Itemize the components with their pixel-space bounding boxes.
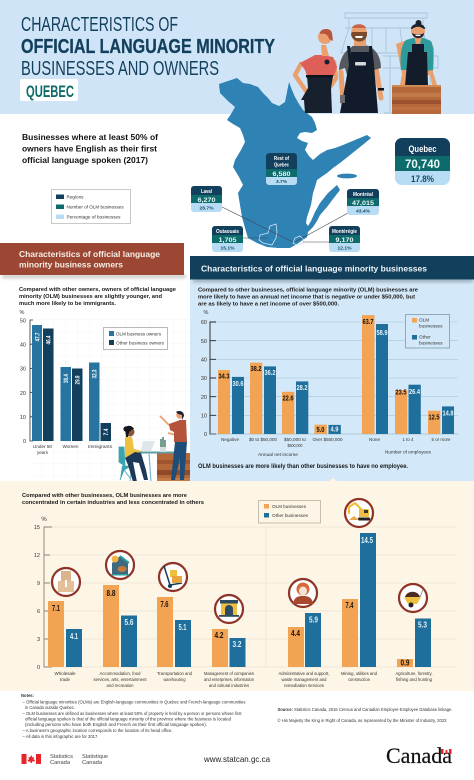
- map: Anticosti island: [337, 174, 357, 178]
- icon: excavator: [345, 499, 373, 527]
- title: [21, 13, 275, 80]
- text block: notes: Notes:: [21, 693, 35, 698]
- icon: accommodation and food: [106, 551, 134, 579]
- bar chart: business owners: Under 50: [33, 444, 52, 449]
- legend: owners: Other business owners: [116, 340, 165, 346]
- callout: Quebec total: 70,740: [405, 157, 440, 171]
- callout: Laval: [191, 186, 222, 212]
- icon: wholesale boxes: [52, 568, 80, 596]
- bar chart: net income and employees: Negative: [221, 437, 239, 442]
- text block: notes: [21, 693, 246, 739]
- bar chart: net income and employees: 30.6: [232, 381, 244, 388]
- panel: businesses header: [190, 256, 474, 282]
- text block: source: © His Majesty the King in Right of Canada, as represented by the Minister of Industry, 2023: [278, 718, 447, 723]
- title: OFFICIAL LANGUAGE MINORITY: [21, 35, 275, 58]
- map: Quebec: [219, 78, 371, 248]
- bar chart: net income and employees: 22.6: [282, 396, 294, 402]
- callout: Outaouais: [212, 226, 243, 252]
- bar chart: industries: 4.1: [70, 632, 78, 641]
- legend: businesses: businesses: [419, 324, 443, 328]
- logo: Statistics Canada flag: Statistics: [50, 754, 73, 760]
- leader lines: [222, 207, 348, 242]
- callout: Rest of Quebec: Quebec: [274, 162, 289, 168]
- callout: Monteregie: Montérégie: [332, 229, 357, 235]
- bar chart: net income and employees: 50: [201, 339, 207, 345]
- callout: Outaouais: Outaouais: [216, 229, 239, 235]
- callout: Montreal: [347, 189, 379, 215]
- bar chart: net income and employees: 28.2: [296, 385, 308, 392]
- legend: map: Percentage of businesses: [66, 214, 121, 220]
- bar chart: business owners: 32.3: [92, 369, 98, 378]
- callout: Rest of Quebec: 6,580: [272, 171, 291, 178]
- panel: businesses header: Characteristics of official language minority businesses: [201, 264, 427, 274]
- text block: intro: official language spoken (2017): [22, 156, 148, 165]
- bar chart: net income and employees: 23.5: [396, 390, 407, 396]
- bar chart: industries: services, arts, entertainment: [94, 677, 147, 682]
- bar chart: net income and employees: 38.2: [250, 366, 262, 373]
- bar chart: industries: waste management and: [282, 677, 327, 682]
- bar chart: net income and employees: 36.2: [264, 370, 276, 377]
- bar chart: industries: Mining, utilities and: [341, 671, 377, 676]
- bar chart: industries: 7.1: [52, 604, 60, 613]
- panel: header banner: [0, 0, 474, 114]
- text block: notes: – Official language minorities (OLMs) are English-language communities in Quebec and French-language communities: [22, 700, 246, 704]
- bar chart: industries: 0.9: [400, 658, 410, 668]
- callout: Monteregie: 12.1%: [338, 246, 352, 252]
- callout: Rest of Quebec: 3.7%: [276, 179, 288, 185]
- badge: Quebec: QUEBEC: [26, 82, 74, 101]
- bar chart: net income and employees: 14.8: [442, 410, 454, 418]
- bar chart: net income and employees: 63.7: [362, 319, 374, 326]
- bar chart: business owners: years: [37, 450, 49, 455]
- callout: Rest of Quebec: [266, 153, 297, 185]
- bar chart: industries: 7.4: [346, 601, 354, 610]
- callout: Outaouais: 1,705: [218, 237, 237, 244]
- bar chart: industries: and cultural industries: [209, 683, 250, 688]
- text block: businesses summary: more likely to have an annual net income that is negative or under $50,000, but: [198, 294, 415, 300]
- legend: map: Regions: [66, 194, 84, 200]
- bar chart: industries: 4.2: [214, 631, 224, 640]
- bar chart: business owners: Women: [62, 444, 79, 449]
- bar chart: net income and employees: [201, 310, 458, 457]
- bar chart: net income and employees: 20: [201, 395, 207, 401]
- bar chart: net income and employees: 26.4: [409, 389, 420, 396]
- bar chart: industries: trade: [60, 677, 70, 682]
- legend: industries: Other businesses: [272, 513, 309, 518]
- legend: businesses: Other: [419, 334, 431, 340]
- illustration: storefront outline: [341, 13, 438, 113]
- bar chart: net income and employees: 10: [201, 414, 207, 420]
- text block: intro: [22, 133, 158, 165]
- bar chart: industries: Accommodation, food: [100, 671, 141, 676]
- bar chart: business owners: 29.8: [74, 375, 82, 384]
- bar chart: industries: Transportation and: [157, 671, 192, 676]
- bar chart: business owners: 0: [23, 439, 26, 445]
- text block: owners summary: much more likely to be immigrants.: [19, 301, 116, 307]
- text block: businesses summary: Compared to other businesses, official language minority (OLM) businesses are: [198, 288, 419, 294]
- title: CHARACTERISTICS OF: [21, 13, 178, 36]
- illustration: woman with red shirt: [295, 29, 337, 113]
- bar chart: net income and employees: $50,000 to: [284, 437, 306, 442]
- text block: owners summary: Compared with other owners, owners of official language: [19, 287, 177, 293]
- bar chart: net income and employees: 1 to 4: [402, 437, 414, 442]
- legend: map: [52, 190, 130, 224]
- legend: businesses: OLM: [419, 318, 429, 322]
- callout: Monteregie: 9,170: [336, 237, 354, 244]
- text block: businesses summary: [198, 288, 419, 308]
- text block: owners summary: [19, 287, 177, 307]
- text block: notes: – All data in this infographic are for 2017.: [22, 734, 98, 739]
- bar chart: business owners: 10: [20, 415, 26, 421]
- bar chart: net income and employees: 30: [201, 376, 207, 382]
- callout: Montreal: 47,015: [352, 200, 374, 207]
- bar chart: net income and employees: Over $500,000: [312, 437, 343, 442]
- bar chart: industries: 5.6: [124, 618, 134, 627]
- bar chart: industries: 3.2: [232, 640, 242, 649]
- bar chart: net income and employees: 5 or more: [432, 437, 451, 442]
- bar chart: net income and employees: 12.5: [428, 414, 440, 422]
- panel: industries: [0, 478, 474, 691]
- bar chart: business owners: [20, 310, 190, 483]
- icon: wheelbarrow: [399, 584, 427, 612]
- panel: businesses background: [190, 279, 474, 481]
- map: Outaouais and Laval outlines: [259, 224, 304, 245]
- callout: Montreal: Montréal: [353, 192, 373, 198]
- bar chart: net income and employees: %: [204, 310, 209, 316]
- bar chart: net income and employees: Annual net income: [258, 452, 298, 457]
- legend: owners: OLM business owners: [116, 332, 162, 336]
- bar chart: industries: 8.8: [106, 589, 116, 598]
- bar chart: net income and employees: Number of employees: [385, 450, 432, 454]
- bar chart: net income and employees: 40: [201, 358, 207, 364]
- bar chart: business owners: 30.4: [63, 374, 70, 383]
- logo: Canada wordmark: Canada: [386, 743, 452, 768]
- bar chart: net income and employees: 4.9: [330, 426, 339, 434]
- bar chart: industries: 15: [34, 525, 40, 531]
- bar chart: business owners: 50: [20, 318, 26, 324]
- text block: industries summary: [22, 493, 205, 506]
- legend: owners: [104, 328, 168, 350]
- bar chart: business owners: 7.4: [103, 428, 110, 436]
- callout: Montreal: 43.4%: [356, 208, 371, 214]
- illustration: wooden counter: [392, 85, 441, 114]
- legend: businesses: [406, 314, 450, 348]
- bar chart: net income and employees: $500,000: [288, 443, 303, 448]
- bar chart: business owners: Immigrants: [88, 444, 113, 449]
- bar chart: industries: 14.5: [361, 536, 373, 545]
- legend: map: Number of OLM businesses: [66, 204, 124, 210]
- bar chart: business owners: 47.7: [34, 332, 42, 342]
- bar chart: industries: and enterprises, information: [204, 677, 254, 682]
- bar chart: business owners: 46.4: [46, 335, 52, 344]
- bar chart: industries: remediation services: [284, 683, 325, 688]
- bar chart: industries: 12: [34, 553, 40, 559]
- bar chart: net income and employees: $0 to $50,000: [249, 437, 277, 442]
- bar chart: industries: 9: [37, 581, 40, 587]
- text block: notes: official language spoken is that of the official language minority of the province where the business is located: [25, 716, 232, 722]
- text block: industries summary: concentrated in certain industries and less concentrated in others: [22, 500, 205, 506]
- legend: industries: [258, 500, 320, 523]
- bar chart: net income and employees: 34.3: [218, 374, 230, 380]
- text block: businesses summary: are as likely to have a net income of over $500,000.: [198, 302, 339, 308]
- callout: Quebec total: 17.8%: [411, 174, 434, 184]
- bar chart: industries: Management of companies: [204, 671, 255, 676]
- callout: Quebec total: [395, 138, 450, 185]
- bar chart: industries: Agriculture, forestry,: [396, 671, 432, 676]
- panel: owners header: [0, 243, 186, 278]
- text block: industries summary: Compared with other businesses, OLM businesses are more: [22, 493, 188, 499]
- bar chart: industries: [34, 500, 456, 688]
- bar chart: net income and employees: None: [369, 437, 380, 442]
- legend: industries: OLM businesses: [272, 504, 307, 509]
- callout: Monteregie: [329, 226, 360, 252]
- logo: Statistics Canada flag: [22, 754, 108, 766]
- bar chart: business owners: %: [20, 310, 25, 316]
- logo: Statistics Canada flag: Statistique: [82, 754, 108, 760]
- bar chart: industries: warehousing: [164, 677, 186, 682]
- bar chart: industries: 3: [37, 637, 40, 643]
- bar chart: industries: and recreation: [106, 683, 134, 688]
- bar chart: net income and employees: 5.0: [316, 427, 325, 434]
- illustration: office meeting: [119, 411, 190, 483]
- text block: source: Source: Statistics Canada, 2016 Census and Canadian Employer-Employee Database linkage.: [278, 707, 452, 712]
- panel: owners header: minority business owners: [19, 260, 124, 270]
- text block: notes: – A business's geographic location corresponds to the location of its head office.: [22, 728, 172, 733]
- panel: owners header: Characteristics of official language: [19, 250, 161, 259]
- bar chart: industries: 4.4: [291, 629, 300, 638]
- bar chart: industries: fishing and hunting: [396, 677, 432, 682]
- text block: source: [278, 707, 452, 723]
- title: BUSINESSES AND OWNERS: [21, 57, 219, 80]
- callout: Laval: 28.7%: [200, 206, 214, 212]
- bar chart: business owners: 20: [20, 391, 26, 397]
- bar chart: net income and employees: 0: [204, 432, 207, 438]
- bar chart: industries: 0: [37, 665, 40, 671]
- callout: Outaouais: 15.1%: [220, 246, 235, 252]
- icon: institution building: [215, 595, 243, 623]
- bar chart: industries: 6: [37, 609, 40, 615]
- bar chart: industries: construction: [348, 677, 370, 682]
- bar chart: industries: 5.3: [418, 620, 427, 630]
- illustration: man behind counter: [396, 20, 437, 86]
- website url: www.statcan.gc.ca: [203, 754, 270, 764]
- text block: notes: in Canada outside Quebec.: [25, 705, 75, 710]
- callout: Laval: 6,270: [198, 197, 216, 204]
- text block: notes: – OLM businesses are defined as businesses where at least 50% of property is held by a person or persons whose first: [22, 711, 242, 716]
- bar chart: industries: 5.1: [178, 623, 187, 632]
- text block: intro: Businesses where at least 50% of: [22, 133, 158, 142]
- text block: intro: owners have English as their first: [22, 144, 157, 154]
- callout: Quebec total: Quebec: [408, 144, 436, 155]
- callout: Rest of Quebec: Rest of: [274, 156, 289, 162]
- logo: Statistics Canada flag: Canada: [50, 760, 71, 766]
- bar chart: net income and employees: 58.9: [376, 330, 388, 337]
- bar chart: industries: %: [41, 517, 47, 523]
- illustration: man with grey shirt: [339, 24, 384, 113]
- bar chart: industries: 7.6: [160, 600, 169, 609]
- logo: Statistics Canada flag: Canada: [82, 760, 103, 766]
- bar chart: industries: Wholesale: [54, 671, 76, 676]
- bar chart: industries: Administrative and support,: [278, 671, 330, 676]
- bar chart: net income and employees: 60: [201, 320, 207, 326]
- text block: owners summary: minority (OLM) businesses are slightly younger, and: [19, 294, 162, 300]
- callout: Laval: Laval: [201, 189, 212, 195]
- bar chart: business owners: 40: [20, 342, 26, 348]
- text block: employee note: OLM businesses are more likely than other businesses to have no employee.: [198, 464, 408, 470]
- legend: businesses: businesses: [419, 340, 443, 346]
- bar chart: industries: 5.9: [309, 616, 318, 624]
- icon: hand truck: [159, 563, 187, 591]
- badge: Quebec: [20, 79, 78, 101]
- text block: notes: (including persons who have both English and French as their first official language spoken).: [25, 722, 207, 727]
- icon: call centre agent: [289, 579, 317, 607]
- bar chart: business owners: 30: [20, 366, 26, 372]
